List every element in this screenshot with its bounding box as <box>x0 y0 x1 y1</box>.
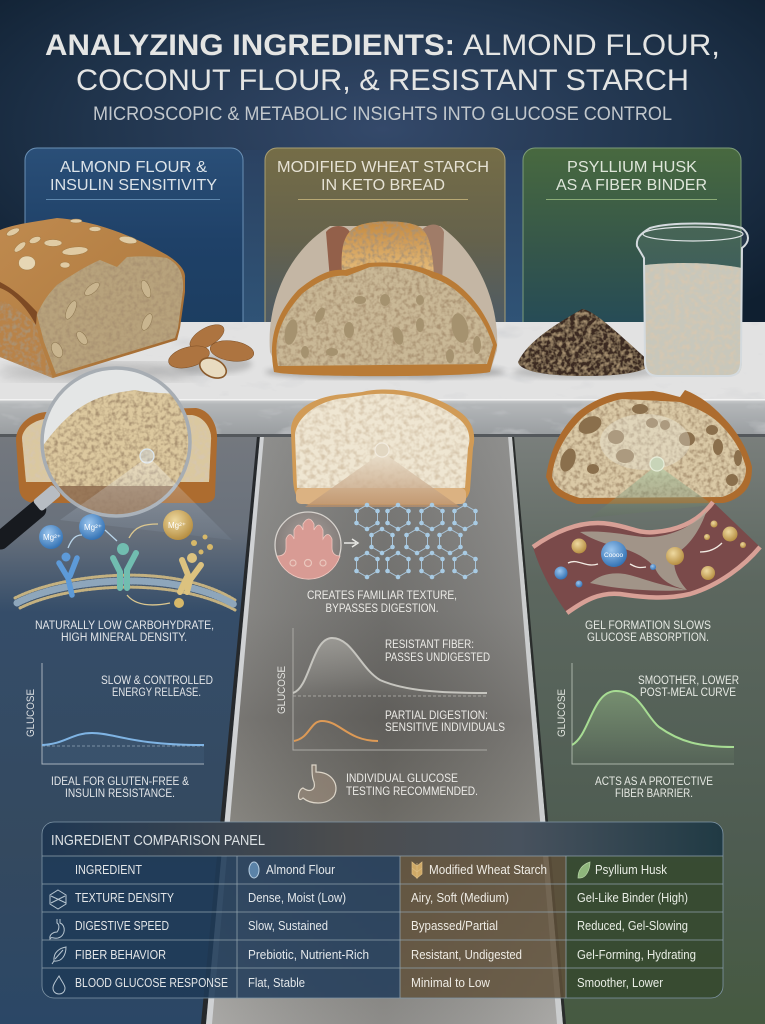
panel: modified wheat starch header card: MODIFIED WHEAT STARCH <box>277 159 489 176</box>
magnifier focus ring <box>140 449 154 463</box>
column: almond flour: Dense, Moist (Low) <box>248 891 346 905</box>
row labels: DIGESTIVE SPEED <box>75 919 169 933</box>
column: almond flour <box>248 862 369 990</box>
teal receptor <box>113 543 136 588</box>
icon: stomach <box>298 765 336 803</box>
takeaway: almond: INSULIN RESISTANCE. <box>65 788 175 800</box>
cell membrane <box>15 575 235 610</box>
takeaway: wheat starch: INDIVIDUAL GLUCOSE <box>346 773 458 785</box>
focus ring: psyllium <box>650 457 664 471</box>
glucose chart: almond: GLUCOSE <box>25 689 37 737</box>
column: almond flour: Prebiotic, Nutrient-Rich <box>248 948 369 962</box>
intestinal gel diagram <box>533 502 760 613</box>
caption: psyllium: GEL FORMATION SLOWS <box>585 620 711 632</box>
panel: psyllium husk header card: PSYLLIUM HUSK <box>567 159 697 176</box>
takeaway: psyllium <box>595 776 713 800</box>
column: modified wheat starch: Airy, Soft (Medium) <box>411 891 509 905</box>
title: ANALYZING INGREDIENTS: <box>45 29 455 62</box>
glucose chart: wheat starch: PASSES UNDIGESTED <box>385 652 490 664</box>
column: almond flour: Almond Flour <box>266 863 335 877</box>
glucose chart: wheat starch: SENSITIVE INDIVIDUALS <box>385 722 505 734</box>
psyllium bread slice with gel <box>546 390 752 504</box>
caption: wheat starch: CREATES FAMILIAR TEXTURE, <box>307 590 457 602</box>
flow arrows <box>68 524 170 605</box>
zoom cone: wheat starch <box>305 456 460 507</box>
icon: intestinal villi <box>275 512 341 579</box>
membrane diagram <box>15 510 235 610</box>
column: modified wheat starch: Resistant, Undigested <box>411 948 522 962</box>
glucose chart: wheat starch: GLUCOSE <box>276 666 288 714</box>
almond slice with magnifier <box>0 366 217 553</box>
gel barriers <box>580 510 707 591</box>
panel: psyllium husk header card <box>523 148 741 334</box>
starch lattice <box>354 503 478 579</box>
column: psyllium husk: Smoother, Lower <box>577 976 663 990</box>
steel panels <box>0 436 765 1024</box>
takeaway: almond <box>51 776 189 800</box>
column: modified wheat starch <box>411 862 547 990</box>
title: ALMOND FLOUR, <box>463 29 720 62</box>
row labels: TEXTURE DENSITY <box>75 891 175 905</box>
caption: almond: HIGH MINERAL DENSITY. <box>61 632 187 644</box>
column: psyllium husk <box>577 862 696 990</box>
panel: modified wheat starch header card: IN KETO BREAD <box>321 177 445 194</box>
glucose chart: psyllium: POST-MEAL CURVE <box>640 687 736 699</box>
arrow: villi to lattice <box>344 539 358 547</box>
title <box>45 29 720 97</box>
caption: wheat starch: BYPASSES DIGESTION. <box>326 603 438 615</box>
glucose chart: almond: SLOW & CONTROLLED <box>101 675 213 687</box>
row labels: FIBER BEHAVIOR <box>75 948 166 962</box>
takeaway: psyllium: FIBER BARRIER. <box>615 788 693 800</box>
rustic loaf <box>265 221 505 379</box>
panel: modified wheat starch header card <box>265 148 505 334</box>
column: almond flour: Slow, Sustained <box>248 919 328 933</box>
glucose chart: psyllium <box>556 663 739 764</box>
gold particles <box>174 534 213 608</box>
column: psyllium husk: Reduced, Gel-Slowing <box>577 919 688 933</box>
blue receptor <box>59 552 77 595</box>
caption: wheat starch <box>307 590 457 615</box>
Mg ions <box>39 510 193 549</box>
Mg ions: Mg²⁺ <box>168 521 186 530</box>
row icons <box>50 890 66 994</box>
glucose chart: wheat starch: RESISTANT FIBER: <box>385 639 474 651</box>
nutrient particles: Coooo <box>604 552 624 559</box>
row labels <box>75 863 228 990</box>
column: psyllium husk: Gel-Forming, Hydrating <box>577 948 696 962</box>
title: COCONUT FLOUR, & RESISTANT STARCH <box>76 64 689 97</box>
column: modified wheat starch: Modified Wheat Starch <box>429 863 547 877</box>
takeaway: wheat starch <box>346 773 478 798</box>
column: modified wheat starch: Minimal to Low <box>411 976 491 990</box>
takeaway: almond: IDEAL FOR GLUTEN-FREE & <box>51 776 189 788</box>
glucose chart: psyllium: SMOOTHER, LOWER <box>638 675 739 687</box>
glucose chart: almond: ENERGY RELEASE. <box>112 687 201 699</box>
table heading: INGREDIENT COMPARISON PANEL <box>51 833 265 849</box>
panel: almond flour header card: INSULIN SENSITIVITY <box>50 177 217 194</box>
column: psyllium husk: Psyllium Husk <box>595 863 668 877</box>
row labels: INGREDIENT <box>75 863 142 877</box>
caption: almond <box>35 620 214 644</box>
white bread slice <box>291 389 474 505</box>
column: modified wheat starch: Bypassed/Partial <box>411 919 498 933</box>
icon: magnifying glass <box>0 366 192 553</box>
almonds <box>166 320 255 382</box>
panel: almond flour header card: ALMOND FLOUR & <box>60 159 207 176</box>
panel: psyllium husk header card: AS A FIBER BINDER <box>556 177 707 194</box>
zoom cone: psyllium <box>590 469 713 518</box>
almond loaf <box>0 218 200 381</box>
psyllium seed pile <box>513 309 657 379</box>
glucose chart: wheat starch <box>276 628 505 750</box>
Mg ions: Mg²⁺ <box>84 523 102 532</box>
takeaway: wheat starch: TESTING RECOMMENDED. <box>346 786 478 798</box>
panel: almond flour header card <box>25 148 243 334</box>
focus ring: wheat starch <box>375 443 389 457</box>
caption: psyllium: GLUCOSE ABSORPTION. <box>587 632 709 644</box>
gold receptor <box>180 553 201 592</box>
row labels: BLOOD GLUCOSE RESPONSE <box>75 976 228 990</box>
column: almond flour: Flat, Stable <box>248 976 305 990</box>
nutrient particles <box>554 520 746 588</box>
marble counter <box>0 322 765 437</box>
glucose chart: psyllium: GLUCOSE <box>556 689 568 737</box>
flow arrows <box>568 543 722 568</box>
glucose chart: almond <box>25 663 213 764</box>
caption: almond: NATURALLY LOW CARBOHYDRATE, <box>35 620 214 632</box>
Mg ions: Mg²⁺ <box>43 533 61 542</box>
background <box>0 0 765 340</box>
zoom cone: almond <box>60 461 232 540</box>
subtitle: MICROSCOPIC & METABOLIC INSIGHTS INTO GLUCOSE CONTROL <box>93 104 672 125</box>
column: psyllium husk: Gel-Like Binder (High) <box>577 891 688 905</box>
caption: psyllium <box>585 620 711 644</box>
panel: ingredient comparison table <box>42 822 723 998</box>
glucose chart: wheat starch: PARTIAL DIGESTION: <box>385 710 488 722</box>
takeaway: psyllium: ACTS AS A PROTECTIVE <box>595 776 713 788</box>
glass beaker with gel <box>637 224 748 376</box>
